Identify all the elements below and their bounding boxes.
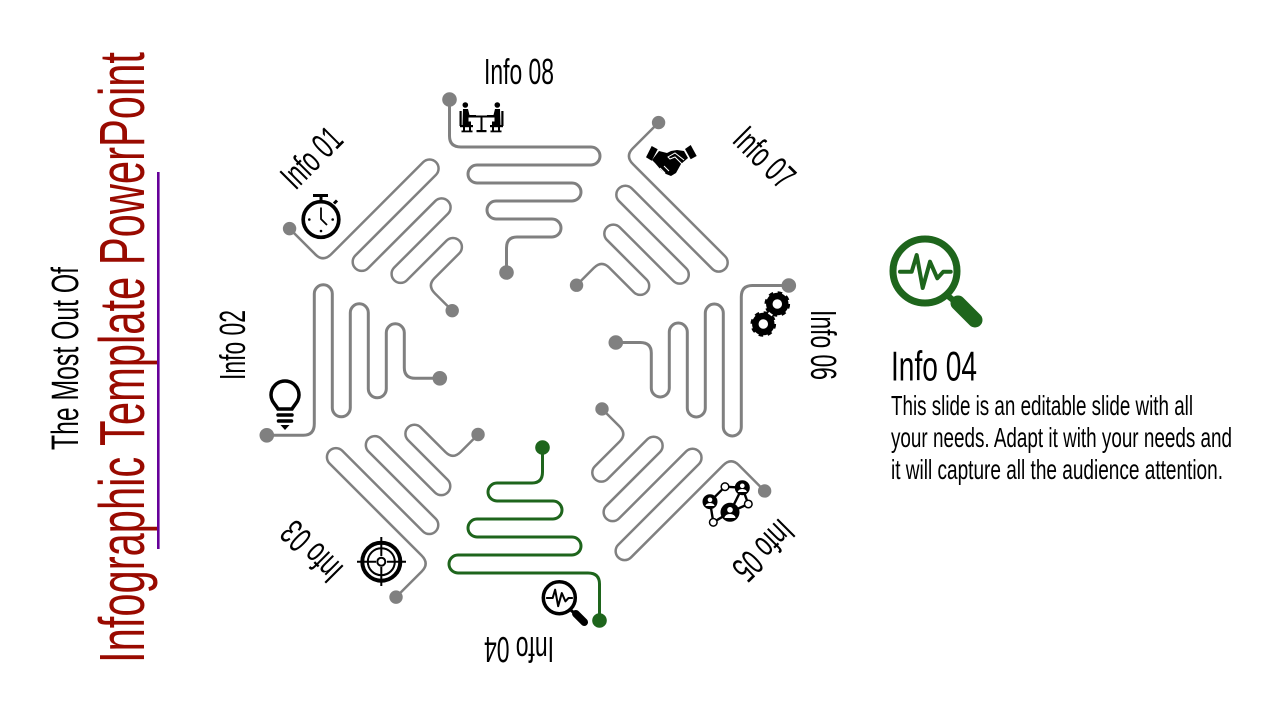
panel: Info 01 xyxy=(272,117,523,360)
label: Info 02: Info 02 xyxy=(212,310,253,380)
circuit path: Info 04 xyxy=(449,440,607,628)
icon: stopwatch xyxy=(303,196,339,237)
icon: handshake xyxy=(646,145,697,176)
subtitle: The Most Out Of xyxy=(45,267,87,450)
icon: people network xyxy=(702,480,752,526)
heading: Info 04: Info 04 xyxy=(891,342,977,390)
circuit path: Info 07 xyxy=(527,113,770,356)
label: Info 06: Info 06 xyxy=(803,310,844,380)
panel: Info 05 xyxy=(531,359,803,602)
circuit path: Info 08 xyxy=(442,92,600,280)
circuit path: Info 05 xyxy=(531,359,774,602)
panel: Info 03 xyxy=(272,364,528,607)
icon: light bulb xyxy=(271,381,299,430)
icon: gears xyxy=(752,293,789,335)
label: Info 03: Info 03 xyxy=(272,512,351,591)
detail panel xyxy=(891,239,1232,485)
icon: target xyxy=(357,537,406,586)
circuit path: Info 06 xyxy=(608,278,796,436)
label: Info 07: Info 07 xyxy=(725,118,804,197)
title underline xyxy=(157,172,160,549)
label: Info 01: Info 01 xyxy=(272,118,351,197)
circuit path: Info 02 xyxy=(260,285,447,443)
panel: Info 08 xyxy=(442,51,600,280)
circuit path: Info 03 xyxy=(285,364,528,607)
label: Info 04: Info 04 xyxy=(484,629,554,670)
icon: meeting at table xyxy=(460,102,504,132)
panel: Info 02 xyxy=(212,285,447,443)
icon: magnifier with pulse xyxy=(543,582,584,622)
label: Info 08: Info 08 xyxy=(484,51,554,92)
circuit path: Info 01 xyxy=(280,117,523,360)
panel: Info 06 xyxy=(608,278,844,436)
icon: large magnifier with pulse xyxy=(893,239,975,320)
label: Info 05: Info 05 xyxy=(724,511,803,590)
panel: Info 04 xyxy=(449,440,607,670)
panel: Info 07 xyxy=(527,113,804,356)
description text xyxy=(891,390,1232,485)
